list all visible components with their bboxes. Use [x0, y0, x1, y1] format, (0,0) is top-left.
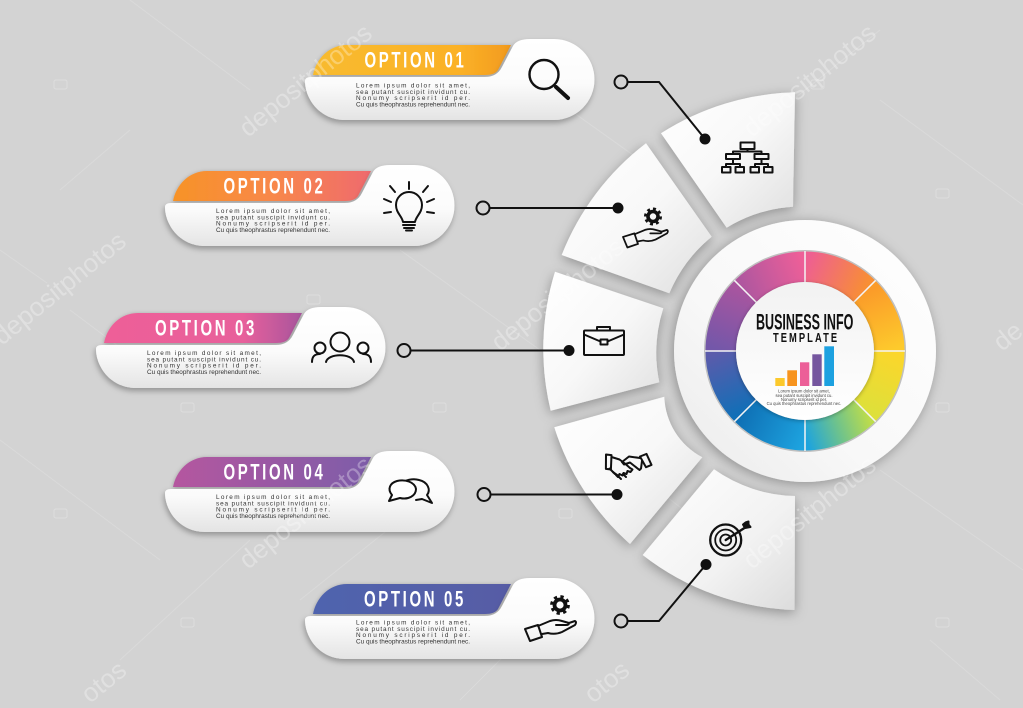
icon: handshake — [606, 454, 652, 479]
title: TEMPLATE — [773, 332, 837, 345]
text block: sea putant suscipit invidunt cu. — [147, 356, 261, 363]
panel: wedge 3 briefcase — [543, 272, 663, 411]
panel: option 01 — [305, 39, 594, 120]
center caption — [767, 388, 841, 406]
text block — [147, 350, 261, 376]
text block: sea putant suscipit invidunt cu. — [216, 214, 330, 221]
watermark: depositphotos — [233, 17, 378, 143]
text block: Lorem ipsum dolor sit amet, — [216, 208, 330, 215]
icon: briefcase — [584, 327, 624, 355]
text block: sea putant suscipit invidunt cu. — [356, 89, 470, 96]
panel: wedge 5 target — [643, 469, 795, 610]
heading: OPTION 05 — [364, 587, 463, 611]
text block: Nonumy scripserit id per. — [356, 632, 470, 639]
panel: wedge 2 gear hand — [562, 143, 712, 293]
text block: sea putant suscipit invidunt cu. — [356, 626, 470, 633]
watermark: depositphotos — [737, 17, 882, 143]
text block: sea putant suscipit invidunt cu. — [216, 500, 330, 507]
icon: org chart — [722, 142, 772, 172]
title — [756, 309, 853, 345]
panel: center circle — [674, 220, 936, 482]
text block: Lorem ipsum dolor sit amet, — [356, 82, 470, 90]
icon: magnifier — [530, 60, 568, 98]
center caption: sea putant suscipit invidunt cu. — [775, 393, 833, 398]
panel: wedge 1 org chart — [661, 92, 795, 228]
text block — [356, 82, 470, 108]
text block: Lorem ipsum dolor sit amet, — [147, 350, 261, 357]
icon: gear and hand — [525, 596, 576, 641]
text block: Nonumy scripserit id per. — [147, 362, 261, 370]
connector 2 — [476, 202, 622, 214]
bar chart — [775, 346, 834, 386]
icon: people — [312, 332, 371, 362]
panel: option 02 — [165, 165, 454, 246]
watermark: otos — [578, 654, 635, 708]
text block: Cu quis theophrastus reprehendunt nec. — [356, 638, 470, 645]
icon: gear and hand — [623, 209, 668, 247]
title: BUSINESS INFO — [756, 309, 853, 334]
text block: Cu quis theophrastus reprehendunt nec. — [216, 227, 330, 234]
text block: Nonumy scripserit id per. — [356, 95, 470, 102]
center caption: Cu quis theophrastus reprehendunt nec. — [767, 401, 841, 406]
center caption: Lorem ipsum dolor sit amet, — [778, 388, 830, 394]
watermark: otos — [75, 654, 132, 708]
connector 3 — [398, 344, 574, 357]
chart: coloured ring — [705, 251, 905, 451]
text block — [216, 494, 330, 520]
text block: Nonumy scripserit id per. — [216, 506, 330, 514]
heading: OPTION 02 — [224, 174, 323, 198]
panel: option 04 — [165, 451, 454, 532]
text block: Cu quis theophrastus reprehendunt nec. — [147, 369, 261, 376]
heading: OPTION 03 — [155, 316, 254, 340]
text block — [356, 620, 470, 645]
watermark: depositphotos — [233, 449, 378, 575]
icon: speech bubbles — [389, 479, 432, 503]
connector 1 — [614, 76, 710, 144]
panel: wedge 4 handshake — [554, 397, 702, 544]
icon: target — [710, 522, 750, 556]
panel: option 03 — [96, 307, 386, 388]
text block: Nonumy scripserit id per. — [216, 220, 330, 228]
watermark: depositphotos — [737, 449, 882, 575]
connector 4 — [478, 488, 622, 501]
center caption: Nonumy scripserit id per. — [781, 397, 827, 402]
text block — [216, 208, 330, 234]
text block: Cu quis theophrastus reprehendunt nec. — [216, 513, 330, 520]
panel: option 05 — [305, 578, 594, 659]
text block: Cu quis theophrastus reprehendunt nec. — [356, 101, 470, 108]
watermark: depositphotos — [485, 231, 630, 357]
heading: OPTION 01 — [364, 48, 464, 72]
heading: OPTION 04 — [224, 460, 323, 484]
connector 5 — [614, 560, 710, 628]
text block: Lorem ipsum dolor sit amet, — [216, 494, 330, 501]
text block: Lorem ipsum dolor sit amet, — [356, 620, 470, 626]
icon: light bulb — [384, 182, 434, 230]
